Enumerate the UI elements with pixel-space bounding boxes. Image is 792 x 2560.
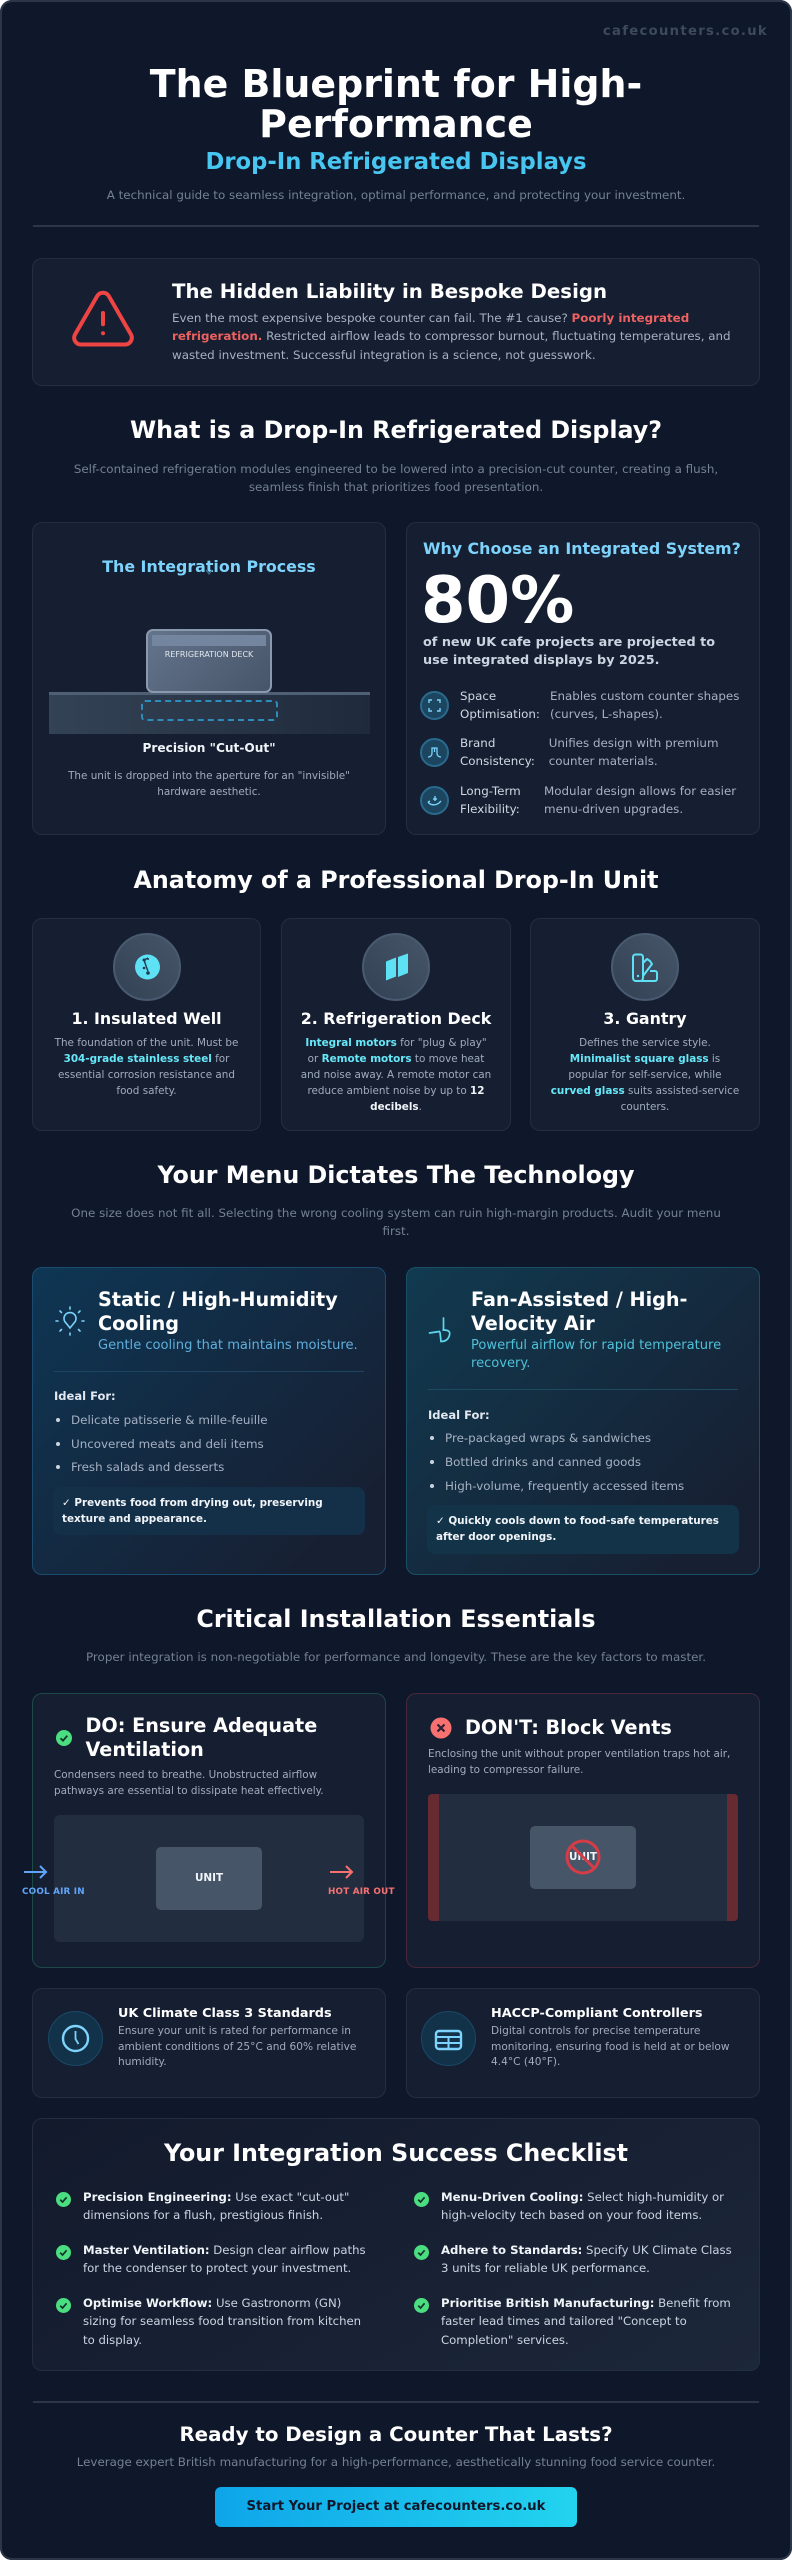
panel: why choose integrated [406,522,760,835]
panel title: Velocity Air [471,1312,595,1335]
title [150,62,642,146]
card text: counters. [621,1101,669,1113]
label: Flexibility: [460,802,520,816]
panel title: DON'T: Block Vents [465,1716,672,1739]
card: climate class [32,1988,386,2098]
panel title: DO: Ensure Adequate [86,1714,317,1737]
panel subtitle: Gentle cooling that maintains moisture. [98,1338,358,1353]
label: Long-Term [460,784,521,798]
heading: what is a drop-in: What is a Drop-In Refrigerated Display? [130,416,662,444]
description: menu-driven upgrades. [544,802,683,816]
benefit note [53,1487,365,1535]
checklist title: Your Integration Success Checklist [164,2139,628,2167]
panel title: Cooling [98,1312,179,1335]
text: menu dictates: One size does not fit all. Selecting the wrong cooling system can ruin high-margin products. Audit your menu [71,1206,721,1220]
deck label: REFRIGERATION DECK [165,650,253,659]
card text: or Remote motors to move heat [308,1053,484,1065]
item: adhere to standards [414,2241,744,2278]
watermark: cafecounters.co.uk [603,24,768,39]
card text: reduce ambient noise by up to 12 [307,1085,485,1097]
panel title [98,1288,338,1335]
heading: anatomy: Anatomy of a Professional Drop-In Unit [134,866,658,894]
ideal for list: Delicate patisserie & mille-feuille [71,1413,268,1427]
item: master ventilation [56,2241,386,2278]
benefit: brand consistency [420,736,719,768]
description: (curves, L-shapes). [550,707,663,721]
benefit note: texture and appearance. [62,1513,207,1525]
benefit: space optimisation [420,688,739,721]
item: british manufacturing [414,2294,744,2350]
card: HACCP controllers [406,1988,760,2098]
item text [83,2294,361,2349]
stat description [423,635,715,668]
icon: down chevron [206,570,212,575]
icon: check [56,2192,71,2206]
card text [118,2024,356,2071]
item text [83,2241,366,2278]
item text [83,2188,349,2225]
card text: Defines the service style. [579,1037,711,1049]
arrow: cool air in [24,1865,48,1879]
card text: food safety. [116,1085,177,1097]
card title: 2. Refrigeration Deck [301,1009,491,1028]
panel text: pathways are essential to dissipate heat effectively. [54,1785,324,1797]
unit: UNIT [195,1872,223,1884]
counter [49,692,370,734]
unit [156,1847,262,1910]
panel title [86,1714,317,1761]
label: Consistency: [460,754,535,768]
item text [441,2188,724,2225]
text: hidden liability: refrigeration. Restricted airflow leads to compressor burnout, fluctuating temperatures, and [172,329,731,343]
button: start your project [215,2487,577,2527]
ideal for label: Ideal For: [428,1408,490,1422]
card text: monitoring, ensuring food is held at or below [491,2041,730,2053]
text: critical installation: Proper integration is non-negotiable for performance and longevity. These are the key factors to master. [86,1650,706,1664]
caption text: The unit is dropped into the aperture for an "invisible" [68,770,350,782]
ideal for list: Bottled drinks and canned goods [445,1455,641,1469]
heading: critical installation: Critical Installation Essentials [196,1605,596,1633]
label [460,688,540,721]
panel: success checklist [32,2118,760,2371]
panel: static cooling [32,1267,386,1575]
title: The Blueprint for High- [150,62,642,106]
heading: integration process: The Integration Process [102,557,316,576]
blocked side wall left [428,1794,439,1921]
icon: green check [56,1730,72,1746]
text: what is a drop-in [74,462,718,494]
refrigeration deck [146,629,272,692]
card text: Digital controls for precise temperature [491,2025,700,2037]
card text: essential corrosion resistance and [58,1069,235,1081]
icon: controller table [421,2010,476,2066]
item text: Precision Engineering: Use exact "cut-out" [83,2190,349,2204]
panel: don't block vents [406,1693,760,1968]
card text: 4.4°C (40°F). [491,2056,560,2068]
heading: menu dictates: Your Menu Dictates The Technology [157,1161,634,1189]
text: hidden liability [172,311,731,362]
heading: hidden liability: The Hidden Liability in Bespoke Design [172,280,607,303]
panel title: Static / High-Humidity [98,1288,338,1311]
caption text: hardware aesthetic. [157,786,261,798]
panel: integration process [32,522,386,835]
icon: gantry [611,933,679,1001]
benefit note [427,1505,739,1554]
icon: insulated well [113,933,181,1001]
card text: Minimalist square glass is [570,1053,720,1065]
panel subtitle: recovery. [471,1356,530,1371]
description: Modular design allows for easier [544,784,736,798]
diagram: blocked vents [428,1794,738,1921]
panel: do ensure ventilation [32,1693,386,1968]
benefit: long-term flexibility [420,784,736,816]
panel text [54,1769,324,1797]
text: menu dictates: first. [382,1224,409,1238]
text: hidden liability: wasted investment. Successful integration is a science, not guesswork. [172,348,596,362]
panel: fan-assisted cooling [406,1267,760,1575]
panel subtitle [471,1338,721,1371]
button: start your project: Start Your Project at cafecounters.co.uk [247,2499,545,2514]
card title: UK Climate Class 3 Standards [118,2006,332,2021]
card text: curved glass suits assisted-service [551,1085,739,1097]
card: refrigeration deck [281,918,511,1131]
card text: decibels. [370,1101,422,1113]
description: Enables custom counter shapes [550,688,739,702]
panel text: leading to compressor failure. [428,1764,583,1776]
ideal for list: Uncovered meats and deli items [71,1437,264,1451]
item text: faster lead times and tailored "Concept to [441,2314,687,2328]
item: menu-driven cooling [414,2188,744,2225]
ideal for label: Ideal For: [54,1389,116,1403]
icon: static cooling [55,1306,85,1336]
icon: check [56,2244,71,2260]
card text [54,1037,238,1097]
arrow: hot air out [330,1865,354,1879]
label: Brand [460,736,495,750]
unit: UNIT [569,1851,597,1863]
benefit note: ✓ Quickly cools down to food-safe temperatures [436,1515,719,1527]
panel title: Fan-Assisted / High- [471,1288,688,1311]
stat description: use integrated displays by 2025. [423,653,659,668]
text: hidden liability: Even the most expensive bespoke counter can fail. The #1 cause? Poorly integrated [172,311,689,325]
card text [491,2024,730,2071]
item text: Optimise Workflow: Use Gastronorm (GN) [83,2296,341,2310]
panel title [471,1288,688,1335]
icon: refrigeration deck [362,933,430,1001]
item text: Completion" services. [441,2333,569,2347]
ideal for list: Pre-packaged wraps & sandwiches [445,1431,651,1445]
diagram: unit dropping into counter [49,629,370,734]
description [544,784,736,816]
card text [551,1037,739,1113]
card: insulated well [32,918,261,1131]
icon: check [414,2244,429,2260]
label: hot air out: HOT AIR OUT [328,1887,395,1897]
item text [441,2241,732,2278]
icon: expand [420,691,449,720]
item text: for the condenser to protect your investment. [83,2261,351,2275]
text: what is a drop-in: seamless finish that prioritizes food presentation. [249,480,543,494]
card title: HACCP-Compliant Controllers [491,2006,703,2021]
icon: no symbol [565,1839,601,1875]
ideal for list [430,1431,684,1493]
item text: Master Ventilation: Design clear airflow paths [83,2243,366,2257]
item text: dimensions for a flush, prestigious finish. [83,2208,323,2222]
label: Space [460,688,496,702]
ideal for list: Fresh salads and desserts [71,1460,224,1474]
panel title: Ventilation [86,1738,204,1761]
card text: Ensure your unit is rated for performance in [118,2025,351,2037]
item text: high-velocity tech based on your food items. [441,2208,702,2222]
heading: call to action: Ready to Design a Counter That Lasts? [179,2423,613,2446]
item: precision engineering [56,2188,386,2225]
text: call to action: Leverage expert British manufacturing for a high-performance, aesthetically stunning food service counter. [77,2455,715,2469]
item text: to display. [83,2333,142,2347]
item text: Adhere to Standards: Specify UK Climate Class [441,2243,732,2257]
item text [441,2294,731,2349]
panel text: Condensers need to breathe. Unobstructed airflow [54,1769,317,1781]
benefit note: ✓ Prevents food from drying out, preserving [62,1497,323,1509]
tagline: A technical guide to seamless integration, optimal performance, and protecting your investment. [107,188,685,202]
item: optimise workflow [56,2294,386,2350]
icon: fan-assisted [428,1317,450,1342]
card text: humidity. [118,2056,167,2068]
caption text [68,770,350,798]
card text: 304-grade stainless steel for [64,1053,229,1065]
panel subtitle: Powerful airflow for rapid temperature [471,1338,721,1353]
icon: check [56,2298,71,2312]
card text: popular for self-service, while [568,1069,722,1081]
panel text: Enclosing the unit without proper ventilation traps hot air, [428,1748,730,1760]
text: what is a drop-in: Self-contained refrigeration modules engineered to be lowered into a precision-cut counter, creating a flush, [74,462,718,476]
icon: flexibility [420,786,449,815]
icon: red cross [430,1718,452,1738]
stat: 80%: 80% [421,564,574,638]
card text: and noise away. A remote motor can [301,1069,491,1081]
icon: clock [48,2010,102,2066]
description: counter materials. [549,754,658,768]
card text: The foundation of the unit. Must be [55,1037,238,1049]
label: cool air in: COOL AIR IN [22,1887,85,1897]
caption: Precision "Cut-Out" [142,741,276,755]
icon: warning triangle [72,290,134,346]
description [550,688,739,721]
card title: 3. Gantry [603,1009,687,1028]
card: gantry [530,918,760,1131]
card text: ambient conditions of 25°C and 60% relative [118,2041,356,2053]
card text [301,1037,491,1113]
item text: Menu-Driven Cooling: Select high-humidity or [441,2190,724,2204]
icon: brand [420,738,449,767]
card text: Integral motors for "plug & play" [305,1037,487,1049]
description: Unifies design with premium [549,736,719,750]
blocked side wall right [727,1794,738,1921]
stat description: of new UK cafe projects are projected to [423,635,715,650]
diagram: airflow [54,1815,364,1942]
subtitle: Drop-In Refrigerated Displays [206,149,586,175]
item text: sizing for seamless food transition from kitchen [83,2314,361,2328]
item text: Prioritise British Manufacturing: Benefit from [441,2296,731,2310]
card title: 1. Insulated Well [71,1009,222,1028]
item text: 3 units for reliable UK performance. [441,2261,650,2275]
panel text [428,1746,730,1778]
panel: hidden liability [32,258,760,386]
text: menu dictates [71,1206,721,1238]
ideal for list [56,1413,268,1474]
cut-out aperture [141,700,278,721]
label [460,736,535,768]
label: Optimisation: [460,707,540,721]
ideal for list: High-volume, frequently accessed items [445,1479,684,1493]
icon: check [414,2192,429,2206]
title: Performance [259,102,533,146]
description [549,736,719,768]
label [460,784,521,816]
icon: check [414,2298,429,2312]
benefit note: after door openings. [436,1531,556,1543]
unit [530,1826,636,1889]
heading: why choose: Why Choose an Integrated System? [423,539,741,558]
